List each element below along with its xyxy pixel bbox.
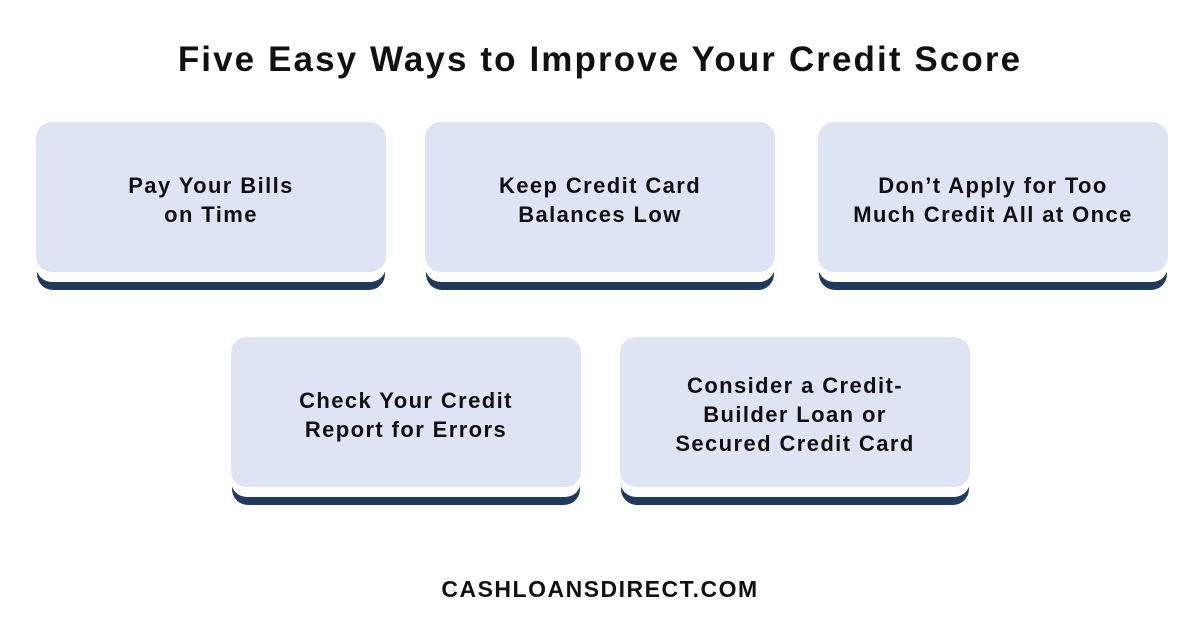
card: balances low: Keep Credit Card bbox=[499, 172, 701, 198]
card: pay bills: Pay Your Bills bbox=[128, 172, 294, 198]
card: balances low: Balances Low bbox=[518, 202, 682, 226]
card: don't apply: Don’t Apply for Too bbox=[878, 172, 1108, 198]
card: don't apply bbox=[818, 122, 1168, 290]
card: credit-builder: Builder Loan or bbox=[703, 402, 887, 427]
card: credit-builder bbox=[620, 337, 970, 505]
card: check report bbox=[231, 337, 581, 505]
card: don't apply: Much Credit All at Once bbox=[853, 202, 1133, 226]
card: pay bills bbox=[36, 122, 386, 290]
footer: CASHLOANSDIRECT.COM bbox=[441, 576, 759, 602]
card: pay bills: on Time bbox=[164, 202, 258, 226]
card: check report: Check Your Credit bbox=[299, 388, 513, 412]
title: Five Easy Ways to Improve Your Credit Score bbox=[178, 40, 1022, 79]
card: balances low bbox=[425, 122, 775, 290]
card: credit-builder: Secured Credit Card bbox=[675, 431, 915, 456]
card: check report: Report for Errors bbox=[305, 416, 507, 442]
card: credit-builder: Consider a Credit- bbox=[687, 373, 903, 398]
